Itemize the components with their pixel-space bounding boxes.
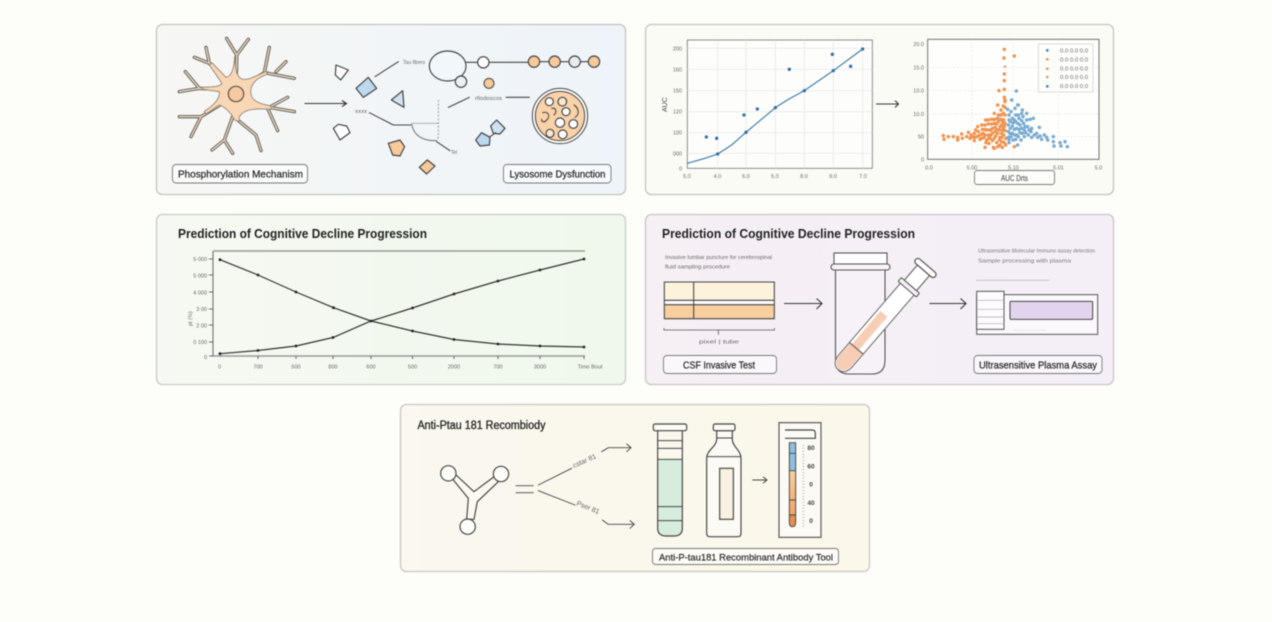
line chart: AUC: 000 bbox=[673, 151, 682, 157]
icon: test strip bbox=[779, 423, 821, 537]
scatter chart: AUC bbox=[913, 39, 1102, 171]
panel: AUC charts bbox=[646, 24, 1114, 194]
text block: assay description: Sample processing with plasma bbox=[978, 258, 1072, 264]
label: phosphorylation mechanism bbox=[172, 164, 308, 183]
small labels: protein diagram: Tel bbox=[451, 150, 457, 156]
line chart: cognitive decline: 5 000 bbox=[193, 257, 207, 263]
line chart: AUC: 6.0 bbox=[742, 174, 750, 180]
scatter chart: AUC: 5.10 bbox=[1008, 166, 1019, 172]
small labels: protein diagram bbox=[355, 60, 502, 156]
heading: Prediction of Cognitive Decline Progression bbox=[662, 226, 915, 241]
arrow: to tube bbox=[784, 298, 822, 309]
scatter chart: AUC: 10.0 bbox=[913, 112, 924, 118]
heading: Anti-Ptau 181 Recombiody bbox=[418, 420, 546, 432]
line chart: AUC: 150 bbox=[673, 89, 682, 95]
scatter chart: AUC: 0.0 0.0 0.0 bbox=[1060, 84, 1088, 90]
label: lower branch: Pser 81 bbox=[575, 500, 600, 516]
text block: CSF description bbox=[665, 255, 772, 270]
line chart: cognitive decline: 0 100 bbox=[193, 340, 207, 346]
heading: Prediction of Cognitive Decline Progression bbox=[178, 226, 427, 241]
icon: assay cartridge bbox=[976, 280, 1098, 334]
line chart: cognitive decline: 800 bbox=[328, 364, 338, 370]
line: rising bbox=[220, 259, 584, 354]
panel: prediction line chart bbox=[156, 214, 626, 384]
text block: assay description bbox=[978, 248, 1095, 264]
strip scale labels: 60 bbox=[807, 464, 815, 470]
label: antibody tool: Anti-P-tau181 Recombinant Antibody Tool bbox=[659, 552, 833, 564]
line chart: AUC: 8.0 bbox=[800, 174, 808, 180]
line chart: AUC: 0 bbox=[679, 166, 682, 172]
scatter chart: AUC: 0.0 bbox=[925, 166, 933, 172]
label: antibody tool bbox=[652, 548, 838, 564]
label: ultrasensitive plasma assay: Ultrasensitive Plasma Assay bbox=[979, 360, 1098, 372]
line chart: cognitive decline: 0 bbox=[204, 355, 207, 361]
line chart: cognitive decline: 4 000 bbox=[193, 290, 207, 296]
arrow: bottle to strip bbox=[753, 477, 767, 483]
scatter chart: AUC: 0.0 0.0 0.0 bbox=[1060, 66, 1088, 72]
strip scale labels: 40 bbox=[807, 500, 815, 507]
line chart: cognitive decline: 700 bbox=[493, 364, 503, 370]
line chart: cognitive decline: 3000 bbox=[534, 364, 546, 370]
text block: assay description: Ultrasensitive Molecular Immuno assay detection bbox=[978, 248, 1095, 254]
line chart: cognitive decline: 0 bbox=[218, 364, 221, 370]
icon: test tube bbox=[828, 253, 937, 378]
line chart: cognitive decline: 700 bbox=[253, 364, 263, 370]
line chart: cognitive decline: 2000 bbox=[448, 364, 460, 370]
icon: bottle bbox=[707, 424, 741, 537]
line chart: cognitive decline: Time Bout bbox=[578, 364, 603, 370]
label: lysosome dysfunction: Lysosome Dysfunction bbox=[510, 168, 606, 180]
line chart: AUC: 4.0 bbox=[714, 174, 721, 180]
scatter chart: AUC: 10.0 bbox=[913, 88, 924, 94]
line chart: AUC: 120 bbox=[673, 110, 682, 116]
caption: pixel | tube bbox=[699, 340, 739, 346]
text block: CSF description: fluid sampling procedure bbox=[665, 264, 730, 270]
label: phosphorylation mechanism: Phosphorylation Mechanism bbox=[178, 168, 303, 180]
label: ultrasensitive plasma assay bbox=[974, 356, 1102, 374]
icon: tube bbox=[653, 424, 687, 536]
scatter chart: AUC: 5.00 bbox=[967, 166, 977, 172]
scatter chart: AUC: 0.0 0.0 0.0 bbox=[1060, 75, 1088, 81]
strip scale labels: 0 bbox=[809, 518, 813, 525]
scatter chart: AUC: 5.01 bbox=[1053, 166, 1064, 172]
icon: neuron bbox=[179, 38, 294, 153]
small labels: protein diagram: rfiodoscos bbox=[475, 96, 502, 102]
scatter chart: AUC: 0.0 0.0 0.0 bbox=[1060, 48, 1088, 54]
line chart: cognitive decline: 3 00 bbox=[196, 307, 207, 313]
arrow: line chart to scatter bbox=[876, 100, 898, 108]
label: lysosome dysfunction bbox=[504, 164, 611, 183]
scatter chart: AUC: 50 bbox=[918, 134, 924, 140]
line chart: AUC: 160 bbox=[673, 67, 682, 73]
line chart: cognitive decline: 2 00 bbox=[196, 324, 207, 330]
line chart: cognitive decline: pt (%) bbox=[188, 311, 194, 326]
text block: CSF description: Invasive lumbar puncture for cerebrospinal bbox=[665, 255, 772, 261]
label: AUC bbox=[974, 170, 1054, 184]
scatter chart: AUC: 15.0 bbox=[913, 66, 924, 72]
line chart: AUC: AUC bbox=[662, 97, 669, 112]
line chart: AUC bbox=[662, 40, 872, 180]
strip scale labels: 0 bbox=[809, 482, 813, 488]
scatter chart: AUC: 5.0 bbox=[1095, 166, 1102, 172]
line chart: AUC: 5.0 bbox=[771, 174, 779, 180]
label: CSF invasive test bbox=[664, 356, 776, 374]
label: upper branch: cstar 81 bbox=[572, 453, 598, 470]
diagram: protein fragments and lysosome bbox=[333, 51, 600, 174]
small labels: protein diagram: Tau fibers bbox=[403, 60, 425, 66]
icon: CSF layers bbox=[664, 282, 774, 335]
scatter chart: AUC: 20.0 bbox=[913, 42, 924, 48]
small labels: protein diagram: xxxx bbox=[355, 109, 367, 115]
line: declining bbox=[220, 260, 584, 347]
line chart: cognitive decline: 500 bbox=[408, 364, 417, 370]
panel: anti-p-tau181 antibody bbox=[400, 404, 870, 572]
strip scale labels bbox=[807, 445, 815, 525]
panel: phosphorylation and lysosome bbox=[156, 24, 626, 194]
line chart: cognitive decline: 600 bbox=[366, 364, 376, 370]
icon: antibody and arrows bbox=[441, 444, 634, 534]
strip scale labels: 80 bbox=[807, 445, 815, 452]
line chart: cognitive decline bbox=[188, 251, 603, 370]
scatter chart: AUC: 0 bbox=[921, 158, 924, 164]
line chart: AUC: 7.0 bbox=[859, 174, 867, 180]
panel: CSF test to plasma assay bbox=[646, 214, 1114, 384]
line chart: AUC: 5.0 bbox=[683, 174, 691, 180]
line chart: AUC: 9.0 bbox=[829, 174, 837, 180]
line chart: AUC: 200 bbox=[673, 46, 682, 52]
arrow: to assay bbox=[930, 298, 966, 309]
label: CSF invasive test: CSF Invasive Test bbox=[683, 360, 755, 372]
line chart: cognitive decline: 500 bbox=[291, 364, 301, 370]
icon: tilted tube bbox=[828, 257, 937, 378]
scatter chart: AUC: 0.0 0.0 0.0 bbox=[1060, 58, 1088, 64]
arrow: neuron to proteins bbox=[304, 100, 346, 106]
line chart: AUC: 100 bbox=[673, 131, 682, 137]
icon: lysosome bbox=[532, 88, 588, 144]
line chart: cognitive decline: 5 000 bbox=[193, 274, 207, 280]
icon: tube, bottle, test strip bbox=[653, 423, 821, 537]
label: AUC: AUC Drts bbox=[1001, 173, 1028, 183]
